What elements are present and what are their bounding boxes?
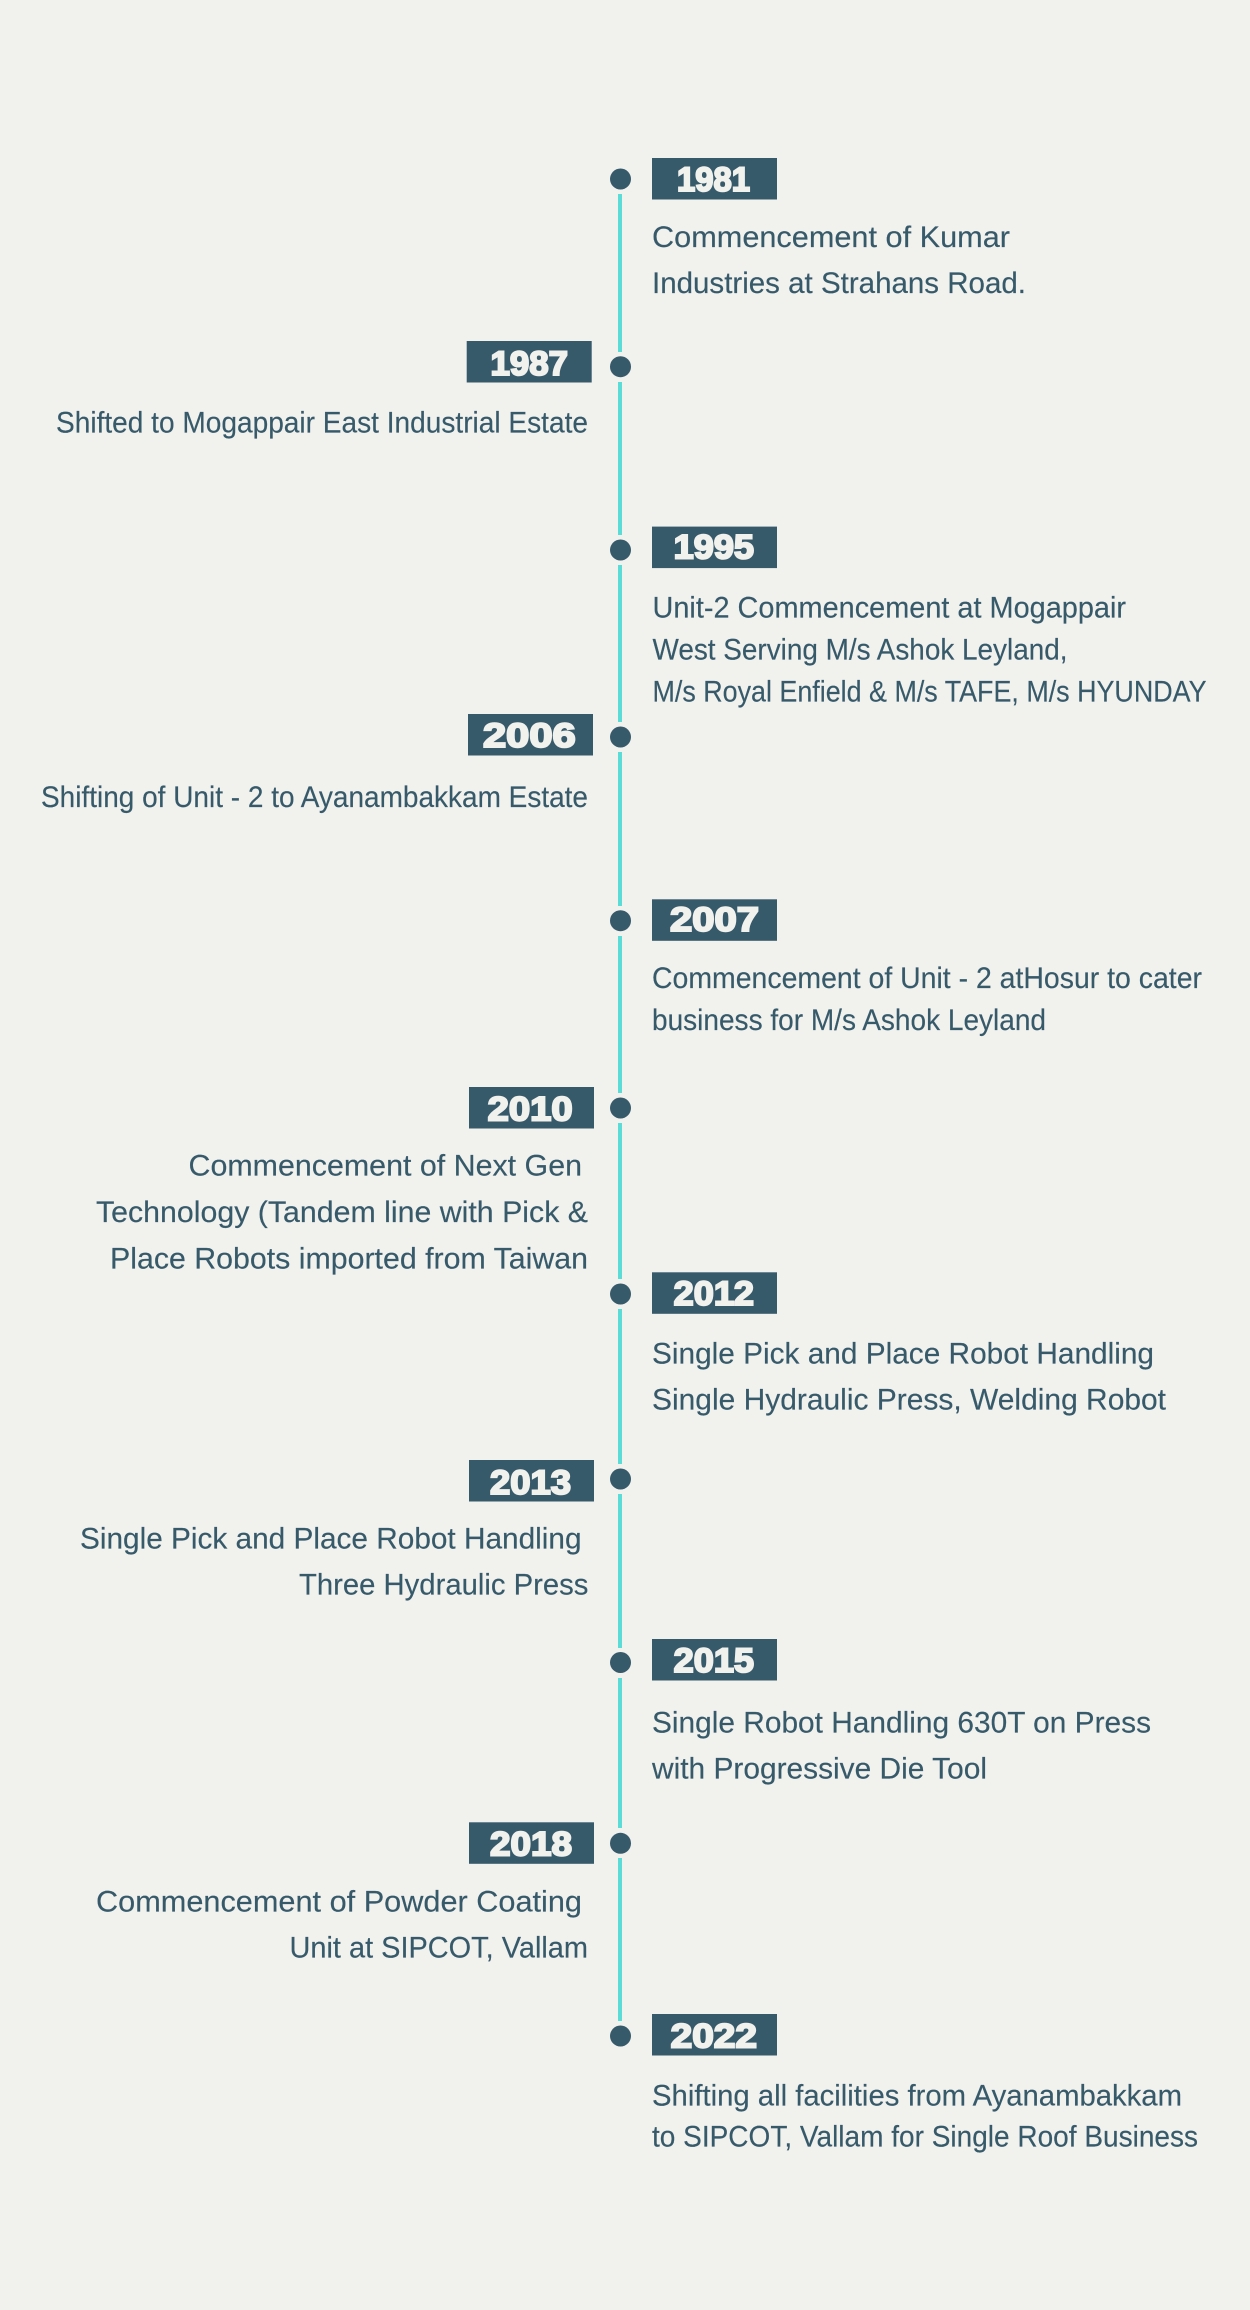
year badge 1987: 1987: [490, 345, 568, 383]
description 2013: Three Hydraulic Press: [299, 1568, 588, 1601]
description 2012: [652, 1337, 1167, 1416]
year badge 2018: 2018: [490, 1826, 572, 1864]
dot 1981: [610, 168, 631, 190]
milestone 1995: [610, 527, 1206, 709]
year badge 2007: 2007: [670, 901, 759, 939]
description 2010: Commencement of Next Gen: [188, 1150, 582, 1183]
description 1995: Unit-2 Commencement at Mogappair: [652, 592, 1126, 625]
description 1981: Industries at Strahans Road.: [652, 267, 1026, 300]
year badge 2007: [652, 899, 777, 941]
year badge 2015: 2015: [674, 1642, 754, 1680]
year badge 2018: [469, 1822, 594, 1864]
description 2015: with Progressive Die Tool: [651, 1752, 987, 1785]
year badge 2010: 2010: [488, 1091, 573, 1129]
year badge 2006: 2006: [483, 717, 576, 755]
description 1995: [652, 592, 1206, 709]
description 2022: [652, 2080, 1198, 2154]
milestone 2010: [96, 1087, 631, 1275]
dot 2018: [610, 1833, 631, 1854]
dot 1995: [610, 540, 631, 560]
description 2022: to SIPCOT, Vallam for Single Roof Business: [652, 2121, 1198, 2154]
description 1987: Shifted to Mogappair East Industrial Estate: [56, 407, 588, 440]
description 2018: Commencement of Powder Coating: [96, 1886, 582, 1919]
year badge 2010: [469, 1087, 594, 1129]
description 2018: Unit at SIPCOT, Vallam: [290, 1932, 588, 1965]
year badge 2013: 2013: [490, 1464, 571, 1502]
year badge 2022: 2022: [671, 2017, 757, 2055]
dot 2006: [610, 726, 631, 748]
year badge 2012: [652, 1272, 777, 1314]
description 2010: Technology (Tandem line with Pick &: [96, 1196, 588, 1229]
dot 2022: [610, 2026, 631, 2046]
description 2012: Single Hydraulic Press, Welding Robot: [652, 1383, 1167, 1416]
description 2015: Single Robot Handling 630T on Press: [652, 1706, 1151, 1739]
milestone 2022: [610, 2014, 1198, 2154]
description 1995: West Serving M/s Ashok Leyland,: [652, 633, 1068, 666]
description 2012: Single Pick and Place Robot Handling: [652, 1337, 1154, 1370]
description 1981: Commencement of Kumar: [652, 221, 1010, 254]
description 2007: Commencement of Unit - 2 atHosur to cater: [652, 962, 1202, 995]
milestone 2015: [610, 1639, 1151, 1785]
year badge 1987: [467, 341, 592, 383]
description 2018: [96, 1886, 588, 1965]
year badge 2006: [468, 714, 593, 756]
description 2022: Shifting all facilities from Ayanambakkam: [652, 2080, 1182, 2113]
description 2013: [80, 1522, 588, 1601]
milestone 1981: [610, 158, 1026, 300]
year badge 1995: 1995: [674, 529, 754, 567]
description 2010: [96, 1150, 588, 1275]
milestone 2018: [96, 1822, 631, 1965]
milestone 2006: [41, 714, 631, 814]
description 1981: [652, 221, 1026, 300]
timeline spine: [618, 194, 622, 2021]
year badge 2022: [652, 2014, 777, 2056]
dot 2010: [610, 1098, 631, 1118]
description 2010: Place Robots imported from Taiwan: [110, 1242, 588, 1275]
milestone 1987: [56, 341, 631, 440]
description 2007: [652, 962, 1202, 1037]
milestone 2013: [80, 1460, 631, 1601]
dot 1987: [610, 356, 631, 377]
dot 2012: [610, 1284, 631, 1304]
dot 2015: [610, 1652, 631, 1673]
year badge 2015: [652, 1639, 777, 1680]
year badge 1981: [652, 158, 777, 200]
description 2013: Single Pick and Place Robot Handling: [80, 1522, 582, 1555]
year badge 1981: 1981: [677, 161, 750, 199]
year badge 2012: 2012: [674, 1275, 754, 1313]
description 2007: business for M/s Ashok Leyland: [652, 1004, 1046, 1037]
milestone 2012: [610, 1272, 1167, 1416]
description 2006: Shifting of Unit - 2 to Ayanambakkam Estate: [41, 781, 588, 814]
description 2015: [651, 1706, 1151, 1785]
dot 2013: [610, 1468, 631, 1490]
milestone 2007: [610, 899, 1202, 1037]
dot 2007: [610, 910, 631, 931]
year badge 1995: [652, 527, 777, 568]
year badge 2013: [469, 1460, 594, 1502]
